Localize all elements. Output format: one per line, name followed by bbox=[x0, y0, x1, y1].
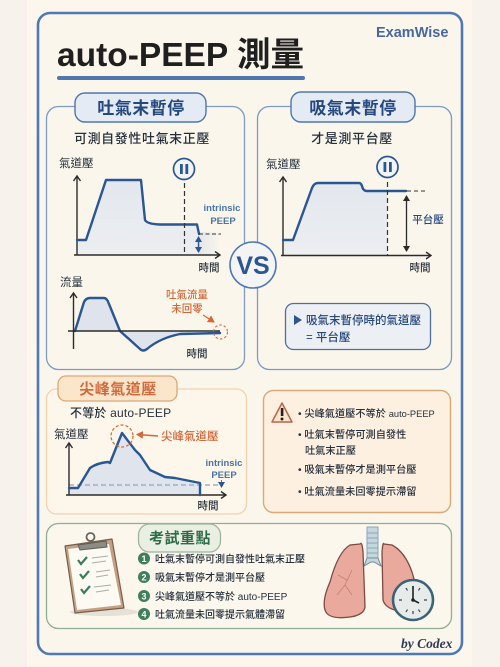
list: warnings: • 吐氣流量未回零提示滯留 bbox=[298, 485, 416, 498]
list: key points: 吐氣流量未回零提示氣體滯留 bbox=[155, 608, 285, 621]
panel: warning summary bbox=[264, 390, 450, 512]
list: key points: 吐氣末暫停可測自發性吐氣末正壓 bbox=[155, 552, 305, 566]
chart: airway pressure: 氣道壓 bbox=[266, 157, 300, 171]
heading: peak pressure bbox=[58, 376, 177, 401]
chart: flow: 時間 bbox=[186, 348, 208, 360]
heading: inspiratory hold: 吸氣末暫停 bbox=[309, 98, 397, 118]
chart: peak airway pressure bbox=[54, 425, 242, 512]
callout: plateau definition: = 平台壓 bbox=[306, 330, 350, 344]
icon: lungs bbox=[324, 527, 420, 618]
icon: pause bbox=[174, 158, 194, 180]
callout: plateau definition bbox=[286, 304, 430, 350]
list: key points: 尖峰氣道壓不等於 auto-PEEP bbox=[155, 590, 288, 603]
icon: clipboard bbox=[65, 533, 138, 616]
heading: expiratory hold: 吐氣末暫停 bbox=[97, 98, 185, 118]
heading: peak pressure: 尖峰氣道壓 bbox=[79, 380, 157, 398]
title: auto-PEEP 測量 bbox=[57, 37, 304, 74]
callout: flow not returning to zero: 吐氣流量 bbox=[166, 288, 208, 301]
callout: plateau definition: 吸氣末暫停時的氣道壓 bbox=[306, 313, 421, 327]
chart: flow bbox=[60, 275, 228, 360]
subtitle: 才是測平台壓 bbox=[311, 131, 393, 146]
label: intrinsic PEEP: intrinsic bbox=[204, 203, 240, 214]
list: key points: 1 bbox=[141, 554, 147, 564]
icon: warning triangle bbox=[272, 403, 292, 422]
label: intrinsic PEEP: PEEP bbox=[211, 470, 237, 481]
chart: airway pressure bbox=[59, 156, 240, 274]
chart: airway pressure: 氣道壓 bbox=[59, 156, 94, 170]
chart: peak airway pressure: 時間 bbox=[198, 500, 218, 512]
list: warnings: 吐氣末正壓 bbox=[305, 444, 356, 457]
subtitle: 不等於 auto-PEEP bbox=[70, 405, 171, 420]
chart: airway pressure: 時間 bbox=[198, 262, 220, 274]
callout: flow not returning to zero bbox=[166, 288, 228, 339]
subtitle: 可測自發性吐氣末正壓 bbox=[74, 131, 210, 146]
callout: peak pressure marker bbox=[111, 425, 218, 447]
icon: clock bbox=[393, 580, 433, 620]
badge: VS bbox=[230, 242, 276, 288]
icon: pause bbox=[377, 156, 398, 178]
label: intrinsic PEEP: PEEP bbox=[210, 216, 236, 227]
chart: peak airway pressure: 氣道壓 bbox=[54, 427, 88, 441]
list: key points bbox=[138, 552, 305, 621]
badge: VS: VS bbox=[236, 252, 270, 280]
label: intrinsic PEEP bbox=[206, 458, 242, 487]
heading: inspiratory hold bbox=[291, 92, 415, 122]
panel: inspiratory hold bbox=[258, 92, 452, 370]
list: key points: 2 bbox=[141, 572, 147, 582]
list: warnings: • 吸氣末暫停才是測平台壓 bbox=[298, 463, 416, 476]
pause dashed line bbox=[184, 183, 186, 255]
callout: peak pressure marker: 尖峰氣道壓 bbox=[161, 429, 218, 443]
list: warnings bbox=[298, 407, 435, 498]
chart: airway pressure: 時間 bbox=[410, 262, 430, 274]
chart: flow: 流量 bbox=[60, 275, 83, 289]
callout: flow not returning to zero: 未回零 bbox=[171, 302, 203, 315]
list: key points: 3 bbox=[141, 592, 147, 602]
panel: peak pressure bbox=[46, 376, 246, 514]
label: intrinsic PEEP: intrinsic bbox=[206, 458, 242, 469]
heading: exam key points: 考試重點 bbox=[149, 529, 211, 547]
panel: expiratory hold bbox=[46, 93, 244, 370]
label: plateau pressure: 平台壓 bbox=[412, 213, 444, 226]
list: warnings: • 吐氣末暫停可測自發性 bbox=[298, 428, 406, 441]
brand: ExamWise: ExamWise bbox=[376, 25, 448, 41]
signature: by Codex bbox=[401, 636, 453, 651]
heading: expiratory hold bbox=[75, 93, 206, 122]
list: key points: 吸氣末暫停才是測平台壓 bbox=[155, 571, 265, 584]
heading: exam key points bbox=[138, 524, 220, 552]
list: warnings: • 尖峰氣道壓不等於 auto-PEEP bbox=[298, 407, 435, 420]
panel: exam key points bbox=[46, 524, 452, 628]
chart: airway pressure bbox=[266, 156, 444, 274]
list: key points: 4 bbox=[141, 610, 147, 620]
label: intrinsic PEEP bbox=[204, 203, 240, 227]
